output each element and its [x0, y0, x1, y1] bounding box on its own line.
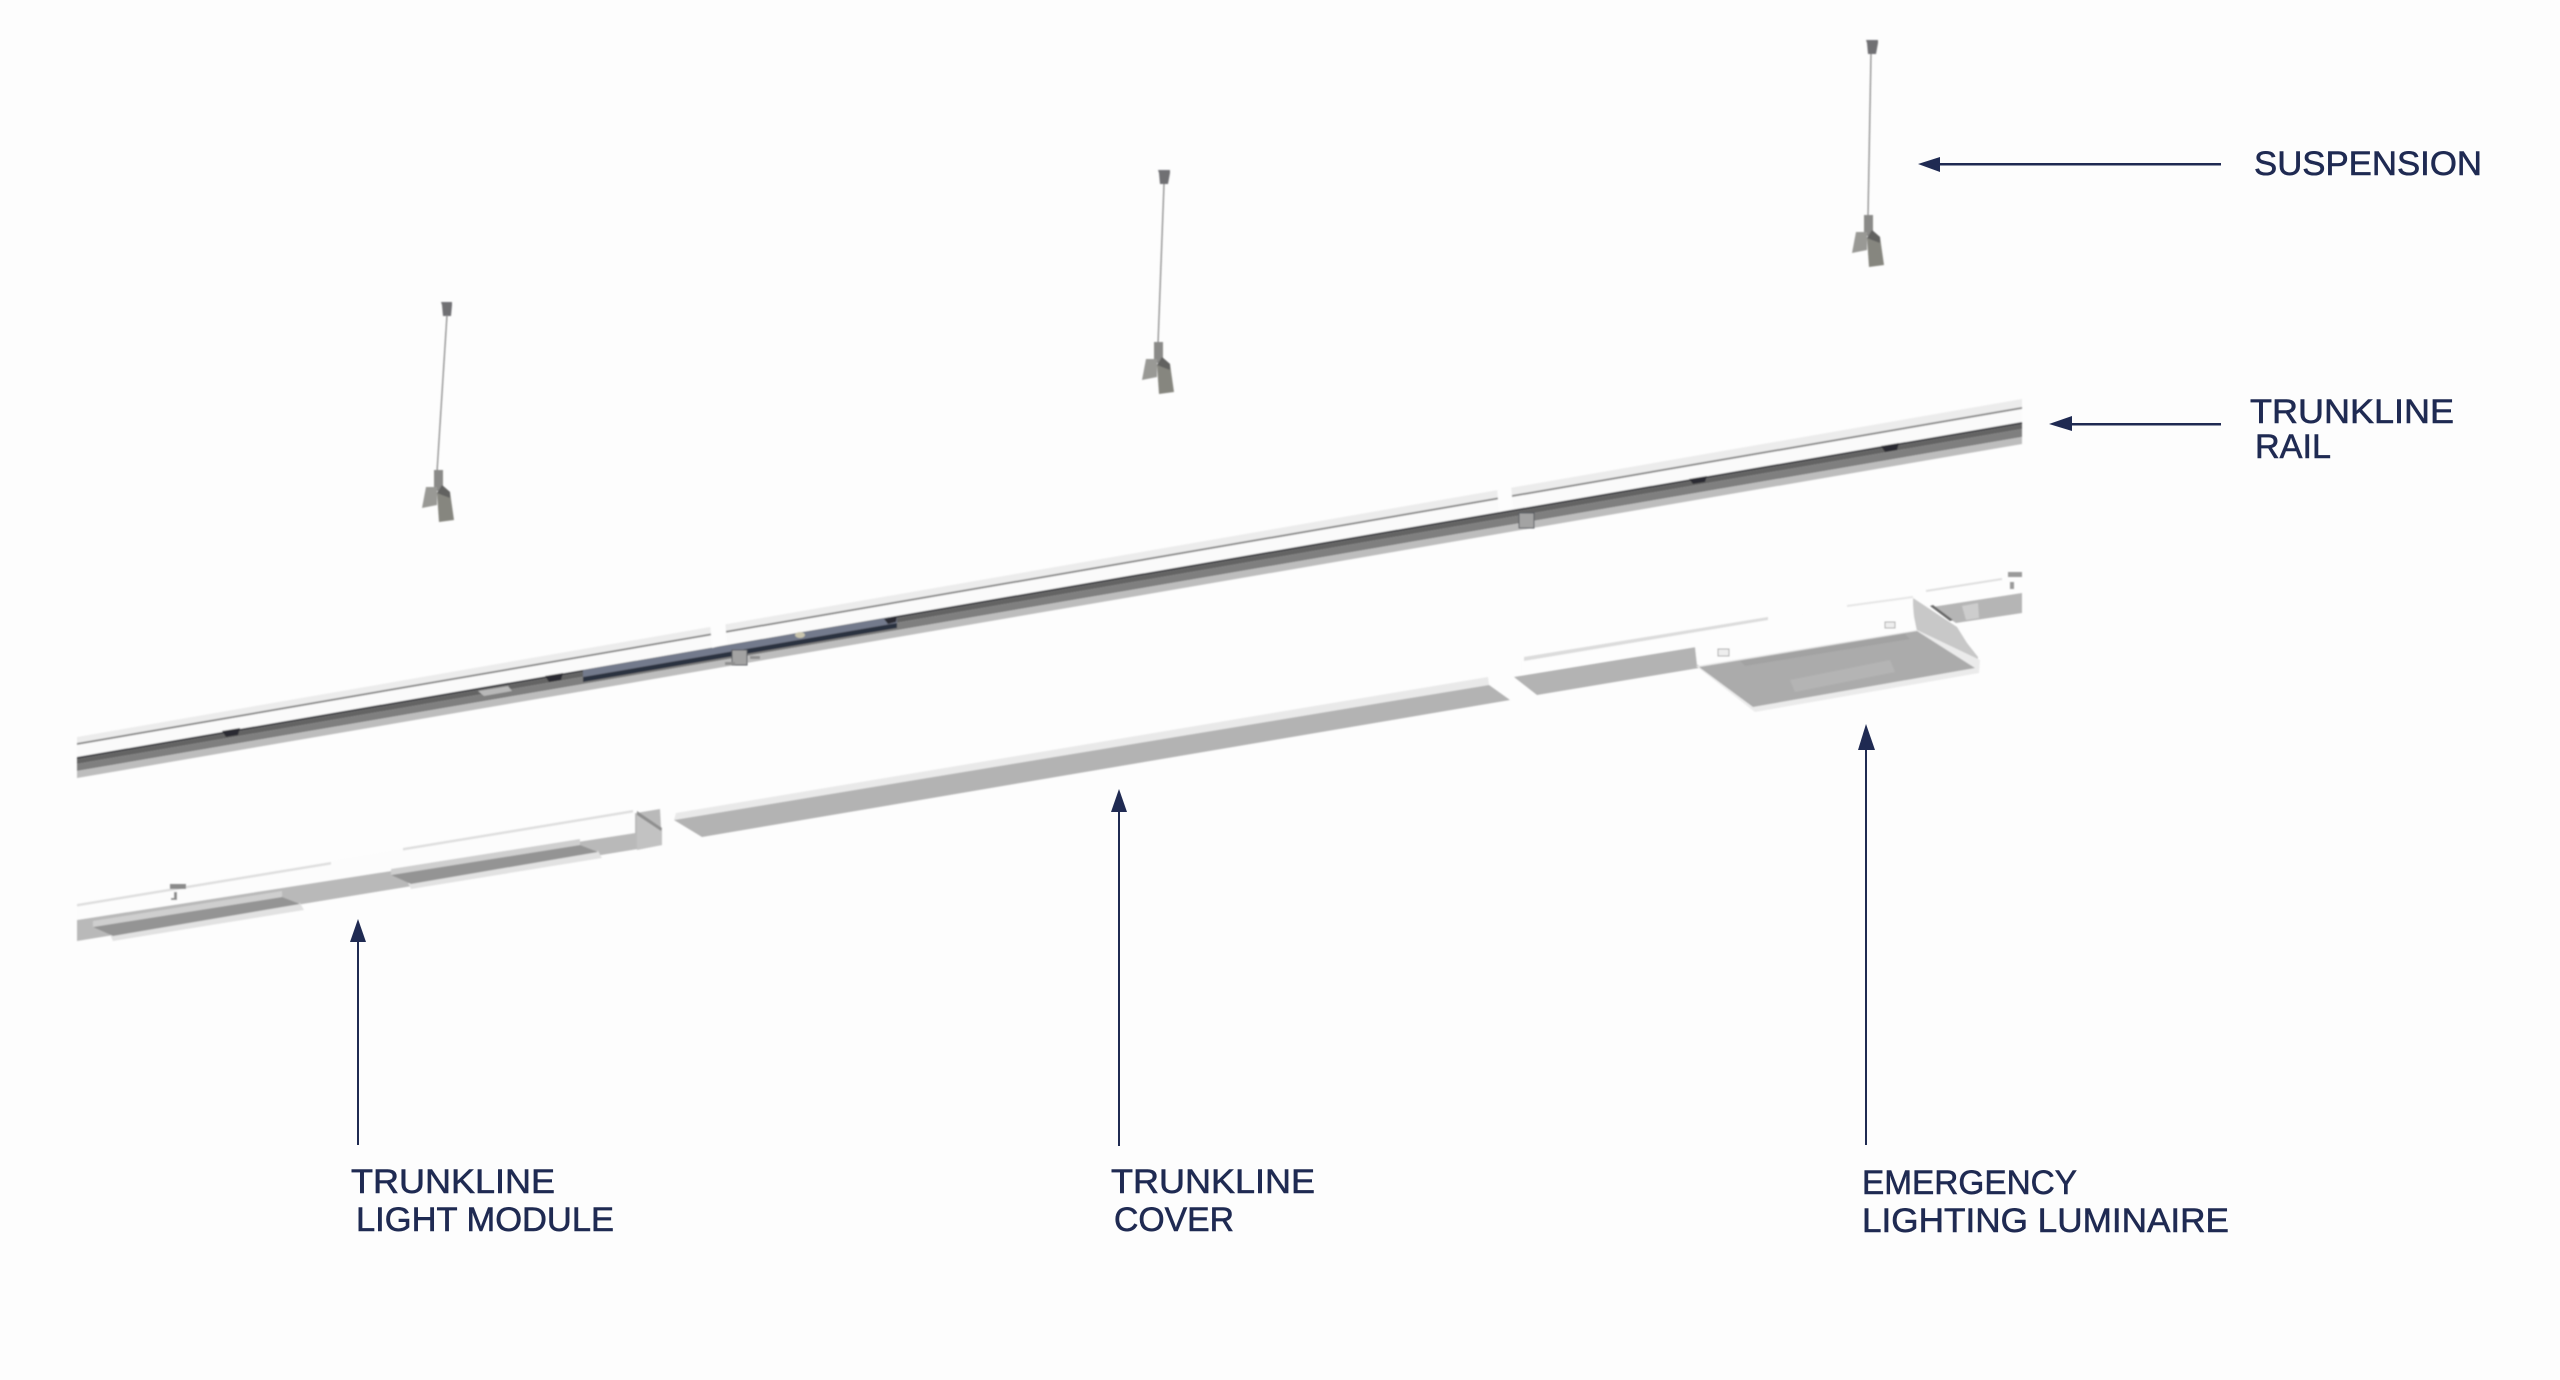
luminaire side	[1913, 598, 1978, 671]
luminaire underside	[1699, 631, 1975, 707]
arrow: suspension	[1918, 157, 2221, 172]
suspension 2	[1142, 170, 1174, 394]
arrow: trunkline light module	[350, 919, 366, 1145]
label: trunkline rail: RAIL	[2255, 428, 2331, 466]
LED module 2	[391, 839, 602, 889]
label: emergency lighting luminaire	[1862, 1164, 2229, 1240]
label: emergency lighting luminaire: LIGHTING LUMINAIRE	[1862, 1202, 2229, 1240]
connector mark	[170, 884, 186, 900]
label: trunkline light module: TRUNKLINE	[351, 1163, 555, 1201]
rail segment right	[1926, 572, 2022, 623]
label: emergency lighting luminaire: EMERGENCY	[1862, 1164, 2077, 1202]
luminaire halo	[1696, 630, 1980, 712]
luminaire white body	[1697, 605, 1915, 665]
label: trunkline cover: COVER	[1114, 1201, 1234, 1239]
arrow: emergency lighting luminaire	[1858, 724, 1875, 1145]
suspension 1	[422, 302, 454, 522]
LED module 1	[93, 891, 304, 941]
label: trunkline light module	[351, 1163, 614, 1239]
module end cap	[637, 811, 662, 850]
label: trunkline rail: TRUNKLINE	[2250, 393, 2454, 431]
trunkline cover	[674, 677, 1510, 837]
rail notches	[222, 443, 1899, 737]
arrow: trunkline cover	[1111, 789, 1127, 1146]
rail cover gaps	[710, 485, 1513, 648]
trunkline light module	[77, 809, 662, 941]
cream fitting	[795, 632, 805, 638]
connector clip 2	[1519, 513, 1534, 528]
connector clip 1	[725, 650, 760, 665]
label: suspension: SUSPENSION	[2254, 145, 2482, 183]
rail segment left	[1514, 647, 1699, 695]
suspension 3	[1852, 40, 1884, 267]
emergency lighting luminaire	[1514, 572, 2022, 712]
label: trunkline cover	[1111, 1163, 1315, 1239]
label: trunkline rail	[2250, 393, 2454, 466]
label: trunkline cover: TRUNKLINE	[1111, 1163, 1315, 1201]
exposed rail section	[583, 616, 897, 682]
arrow: trunkline rail	[2049, 416, 2221, 431]
trunkline rail	[77, 399, 2022, 778]
label: trunkline light module: LIGHT MODULE	[356, 1201, 614, 1239]
wiring chip	[478, 686, 512, 696]
